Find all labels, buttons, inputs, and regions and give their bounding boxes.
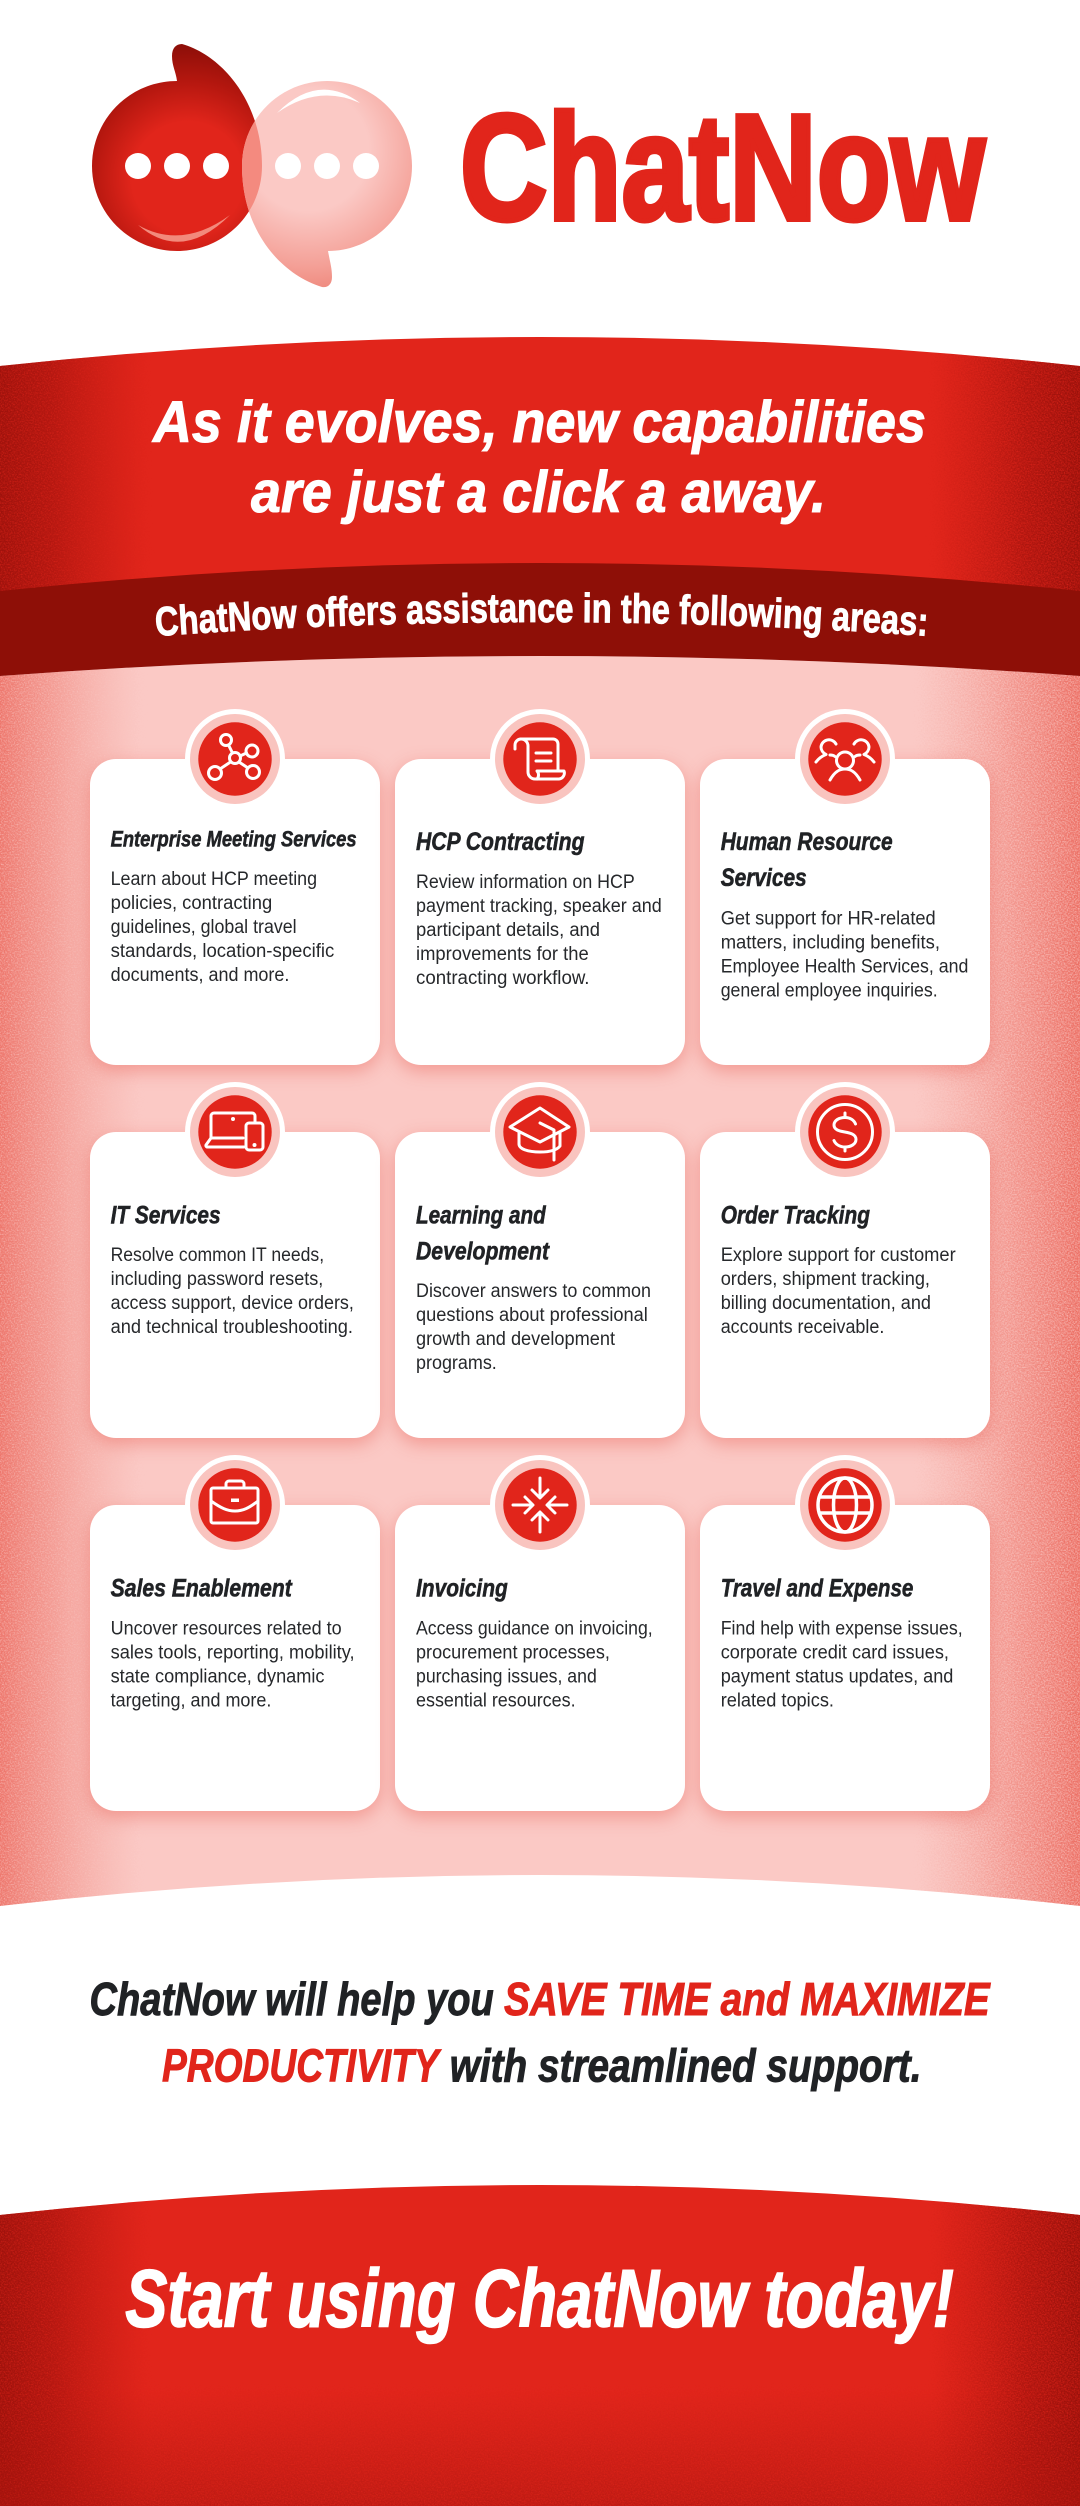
card body text: procurement processes, [416, 1642, 610, 1663]
card title [721, 828, 893, 892]
closing message text: with streamlined support. [450, 2039, 922, 2091]
card body text: Access guidance on invoicing, [416, 1618, 653, 1639]
card background [700, 1132, 990, 1438]
panel: dark red subheading band [0, 563, 1080, 676]
card body text: related topics. [721, 1690, 834, 1711]
card body text: Learn about HCP meeting [111, 869, 317, 890]
closing message text: PRODUCTIVITY [162, 2039, 442, 2091]
card body text: questions about professional [416, 1305, 648, 1326]
card title: Sales Enablement [111, 1575, 293, 1603]
card title: Human Resource [721, 828, 893, 856]
card body text: matters, including benefits, [721, 932, 940, 953]
panel: HCP Contracting card [395, 709, 685, 1065]
panel: red call-to-action band [0, 2150, 1080, 2506]
card body text: improvements for the [416, 944, 589, 965]
panel: Learning and Development card [395, 1082, 685, 1438]
card body text: and technical troubleshooting. [111, 1317, 353, 1338]
card body text: guidelines, global travel [111, 917, 297, 938]
card background [395, 759, 685, 1065]
card body text [721, 908, 968, 1001]
card body text: growth and development [416, 1329, 616, 1350]
icon: dark red speech bubble [92, 44, 262, 251]
icon: pink speech bubble [242, 81, 412, 288]
logo [92, 44, 985, 287]
closing message text: ChatNow will help you [90, 1973, 494, 2025]
card body text: state compliance, dynamic [111, 1666, 324, 1687]
card title [416, 1201, 550, 1265]
card body text [416, 1281, 651, 1374]
card background [395, 1505, 685, 1811]
card body text [416, 1618, 653, 1711]
card body text: sales tools, reporting, mobility, [111, 1642, 355, 1663]
icon: briefcase [185, 1455, 285, 1555]
card body text: corporate credit card issues, [721, 1642, 949, 1663]
card body text: programs. [416, 1353, 497, 1374]
card background [90, 1132, 380, 1438]
card title: Enterprise Meeting Services [111, 827, 357, 852]
card title: HCP Contracting [416, 828, 584, 856]
card title: Travel and Expense [721, 1575, 913, 1603]
icon: dollar coin [795, 1082, 895, 1182]
panel: Enterprise Meeting Services card [90, 709, 380, 1065]
panel: Sales Enablement card [90, 1455, 380, 1811]
card body text: access support, device orders, [111, 1293, 354, 1314]
icon: network nodes [185, 709, 285, 809]
subheading curved text: ChatNow offers assistance in the following areas: [156, 592, 926, 638]
card body text [111, 1618, 355, 1711]
card body text [111, 1245, 354, 1338]
hero heading [151, 390, 926, 525]
card background [90, 759, 380, 1065]
panel: Human Resource Services card [700, 709, 990, 1065]
card body text: general employee inquiries. [721, 980, 938, 1001]
card background [395, 1132, 685, 1438]
hero heading: are just a click a away. [251, 460, 826, 525]
panel: red hero band [0, 337, 1080, 591]
card body text: contracting workflow. [416, 968, 590, 989]
card body text: Resolve common IT needs, [111, 1245, 324, 1266]
card body text: Discover answers to common [416, 1281, 651, 1302]
card background [700, 759, 990, 1065]
panel: pink services background [0, 620, 1080, 1940]
card body text: accounts receivable. [721, 1317, 884, 1338]
card title: Invoicing [416, 1575, 508, 1603]
card body text: standards, location-specific [111, 941, 334, 962]
card body text: payment status updates, and [721, 1666, 953, 1687]
icon: scroll [490, 709, 590, 809]
panel: white closing message band [0, 1875, 1080, 2300]
card background [700, 1505, 990, 1811]
icon: graduation cap [490, 1082, 590, 1182]
card body text: Explore support for customer [721, 1245, 956, 1266]
card body text: essential resources. [416, 1690, 576, 1711]
panel: Order Tracking card [700, 1082, 990, 1438]
icon: laptop and phone [185, 1082, 285, 1182]
card background [90, 1505, 380, 1811]
card body text [721, 1618, 963, 1711]
card body text: Employee Health Services, and [721, 956, 968, 977]
card body text: targeting, and more. [111, 1690, 271, 1711]
card body text: Review information on HCP [416, 872, 635, 893]
card body text: payment tracking, speaker and [416, 896, 662, 917]
card body text: participant details, and [416, 920, 600, 941]
card body text: policies, contracting [111, 893, 272, 914]
card body text: billing documentation, and [721, 1293, 931, 1314]
card body text: Get support for HR-related [721, 908, 936, 929]
card title: Development [416, 1237, 550, 1265]
card body text [721, 1245, 956, 1338]
card body text [111, 869, 334, 986]
icon: inward arrows [490, 1455, 590, 1555]
card body text: including password resets, [111, 1269, 323, 1290]
card body text: Uncover resources related to [111, 1618, 342, 1639]
card body text: purchasing issues, and [416, 1666, 597, 1687]
icon: people group [795, 709, 895, 809]
closing message text [90, 1973, 991, 2091]
card body text [416, 872, 662, 989]
card body text: Find help with expense issues, [721, 1618, 963, 1639]
panel: Travel and Expense card [700, 1455, 990, 1811]
panel: IT Services card [90, 1082, 380, 1438]
card title: IT Services [111, 1201, 221, 1229]
card title: Order Tracking [721, 1201, 870, 1229]
card title: Learning and [416, 1201, 546, 1229]
panel: Invoicing card [395, 1455, 685, 1811]
card title: Services [721, 864, 807, 892]
card body text: orders, shipment tracking, [721, 1269, 930, 1290]
card body text: documents, and more. [111, 965, 289, 986]
closing message text: SAVE TIME and MAXIMIZE [504, 1973, 991, 2025]
icon: globe [795, 1455, 895, 1555]
hero heading: As it evolves, new capabilities [151, 390, 926, 455]
